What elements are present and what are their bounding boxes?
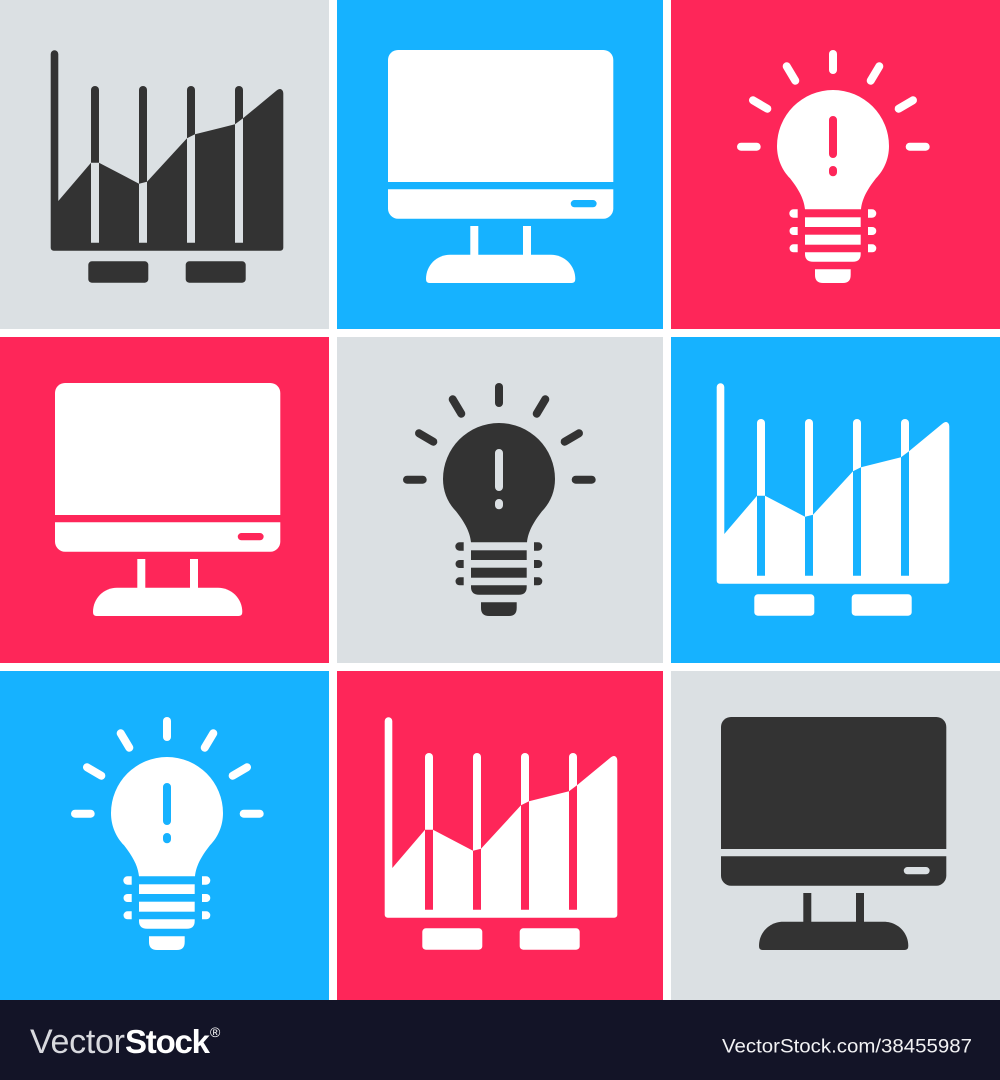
footer band — [0, 1000, 1000, 1080]
logo: VectorStock: Stock — [125, 1023, 211, 1060]
panel: chart on red — [337, 671, 663, 1000]
panel: light bulb on blue — [0, 671, 329, 1000]
icon: light bulb white — [741, 54, 926, 283]
icon: monitor dark — [721, 717, 946, 950]
panel: light bulb on red — [671, 0, 1000, 329]
panel: chart on grey — [0, 0, 329, 329]
logo: VectorStock — [30, 1023, 221, 1061]
icon: area chart dark — [51, 50, 283, 283]
panel: light bulb on grey — [337, 337, 663, 663]
logo: VectorStock: Vector — [30, 1023, 125, 1061]
panel: monitor on blue — [337, 0, 663, 329]
panel: monitor on red — [0, 337, 329, 663]
panel: chart on blue — [671, 337, 1000, 663]
icon: area chart white — [717, 383, 949, 616]
icon: light bulb dark — [407, 387, 592, 616]
logo: VectorStock: ® — [210, 1024, 221, 1040]
icon: monitor white — [55, 383, 280, 616]
image id text: VectorStock.com/38455987 — [722, 1037, 972, 1058]
icon: area chart white — [385, 717, 617, 950]
icon: light bulb white — [75, 721, 260, 950]
panel: monitor on grey — [671, 671, 1000, 1000]
icon: monitor white — [388, 50, 613, 283]
